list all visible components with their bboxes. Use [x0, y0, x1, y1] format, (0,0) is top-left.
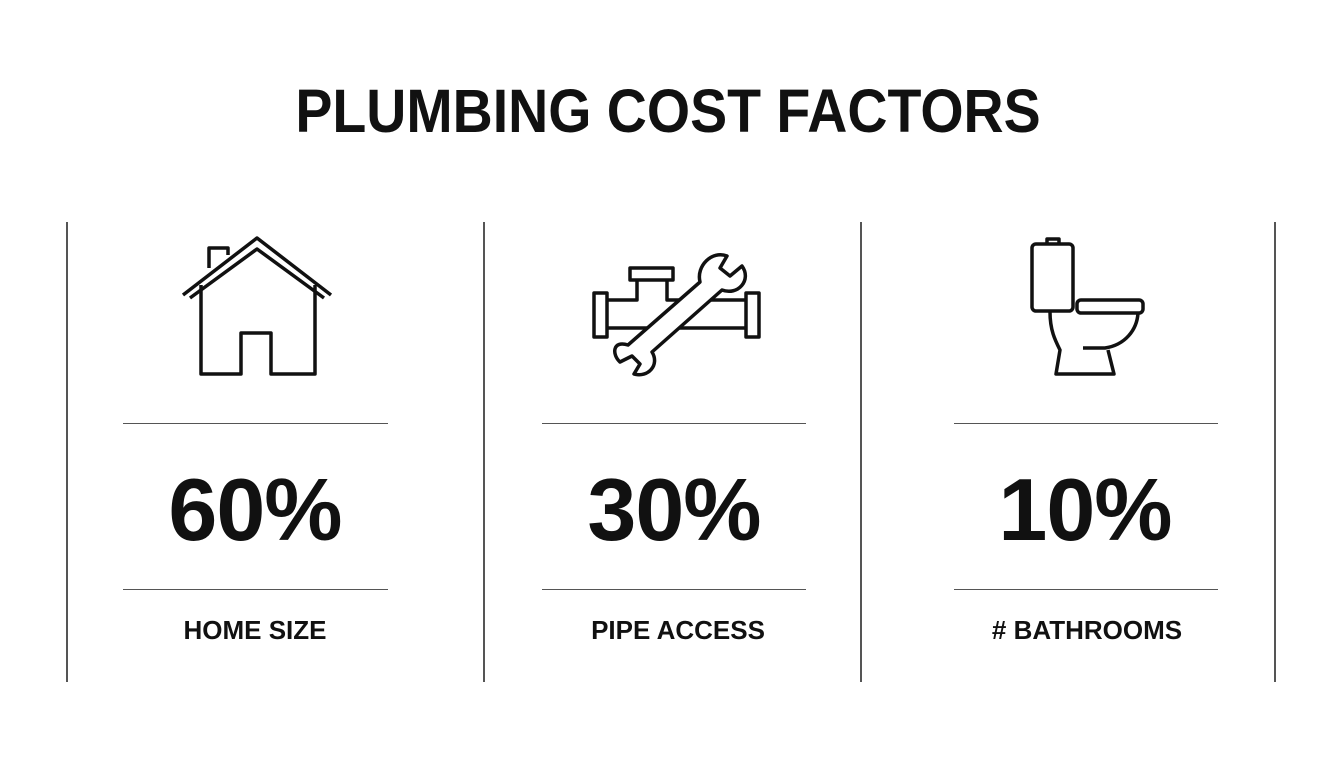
percentage: 60%	[168, 460, 342, 559]
label: PIPE ACCESS	[591, 615, 765, 645]
panel: home size	[123, 236, 388, 645]
title: PLUMBING COST FACTORS	[295, 77, 1041, 145]
panel: pipe access	[542, 253, 806, 645]
panel: bathrooms	[954, 237, 1218, 645]
percentage: 30%	[587, 460, 761, 559]
icon: pipe and wrench	[592, 253, 761, 376]
label: HOME SIZE	[183, 615, 326, 645]
icon: toilet	[1030, 237, 1145, 376]
icon: house	[182, 236, 332, 376]
label: # BATHROOMS	[992, 615, 1182, 645]
percentage: 10%	[998, 460, 1172, 559]
